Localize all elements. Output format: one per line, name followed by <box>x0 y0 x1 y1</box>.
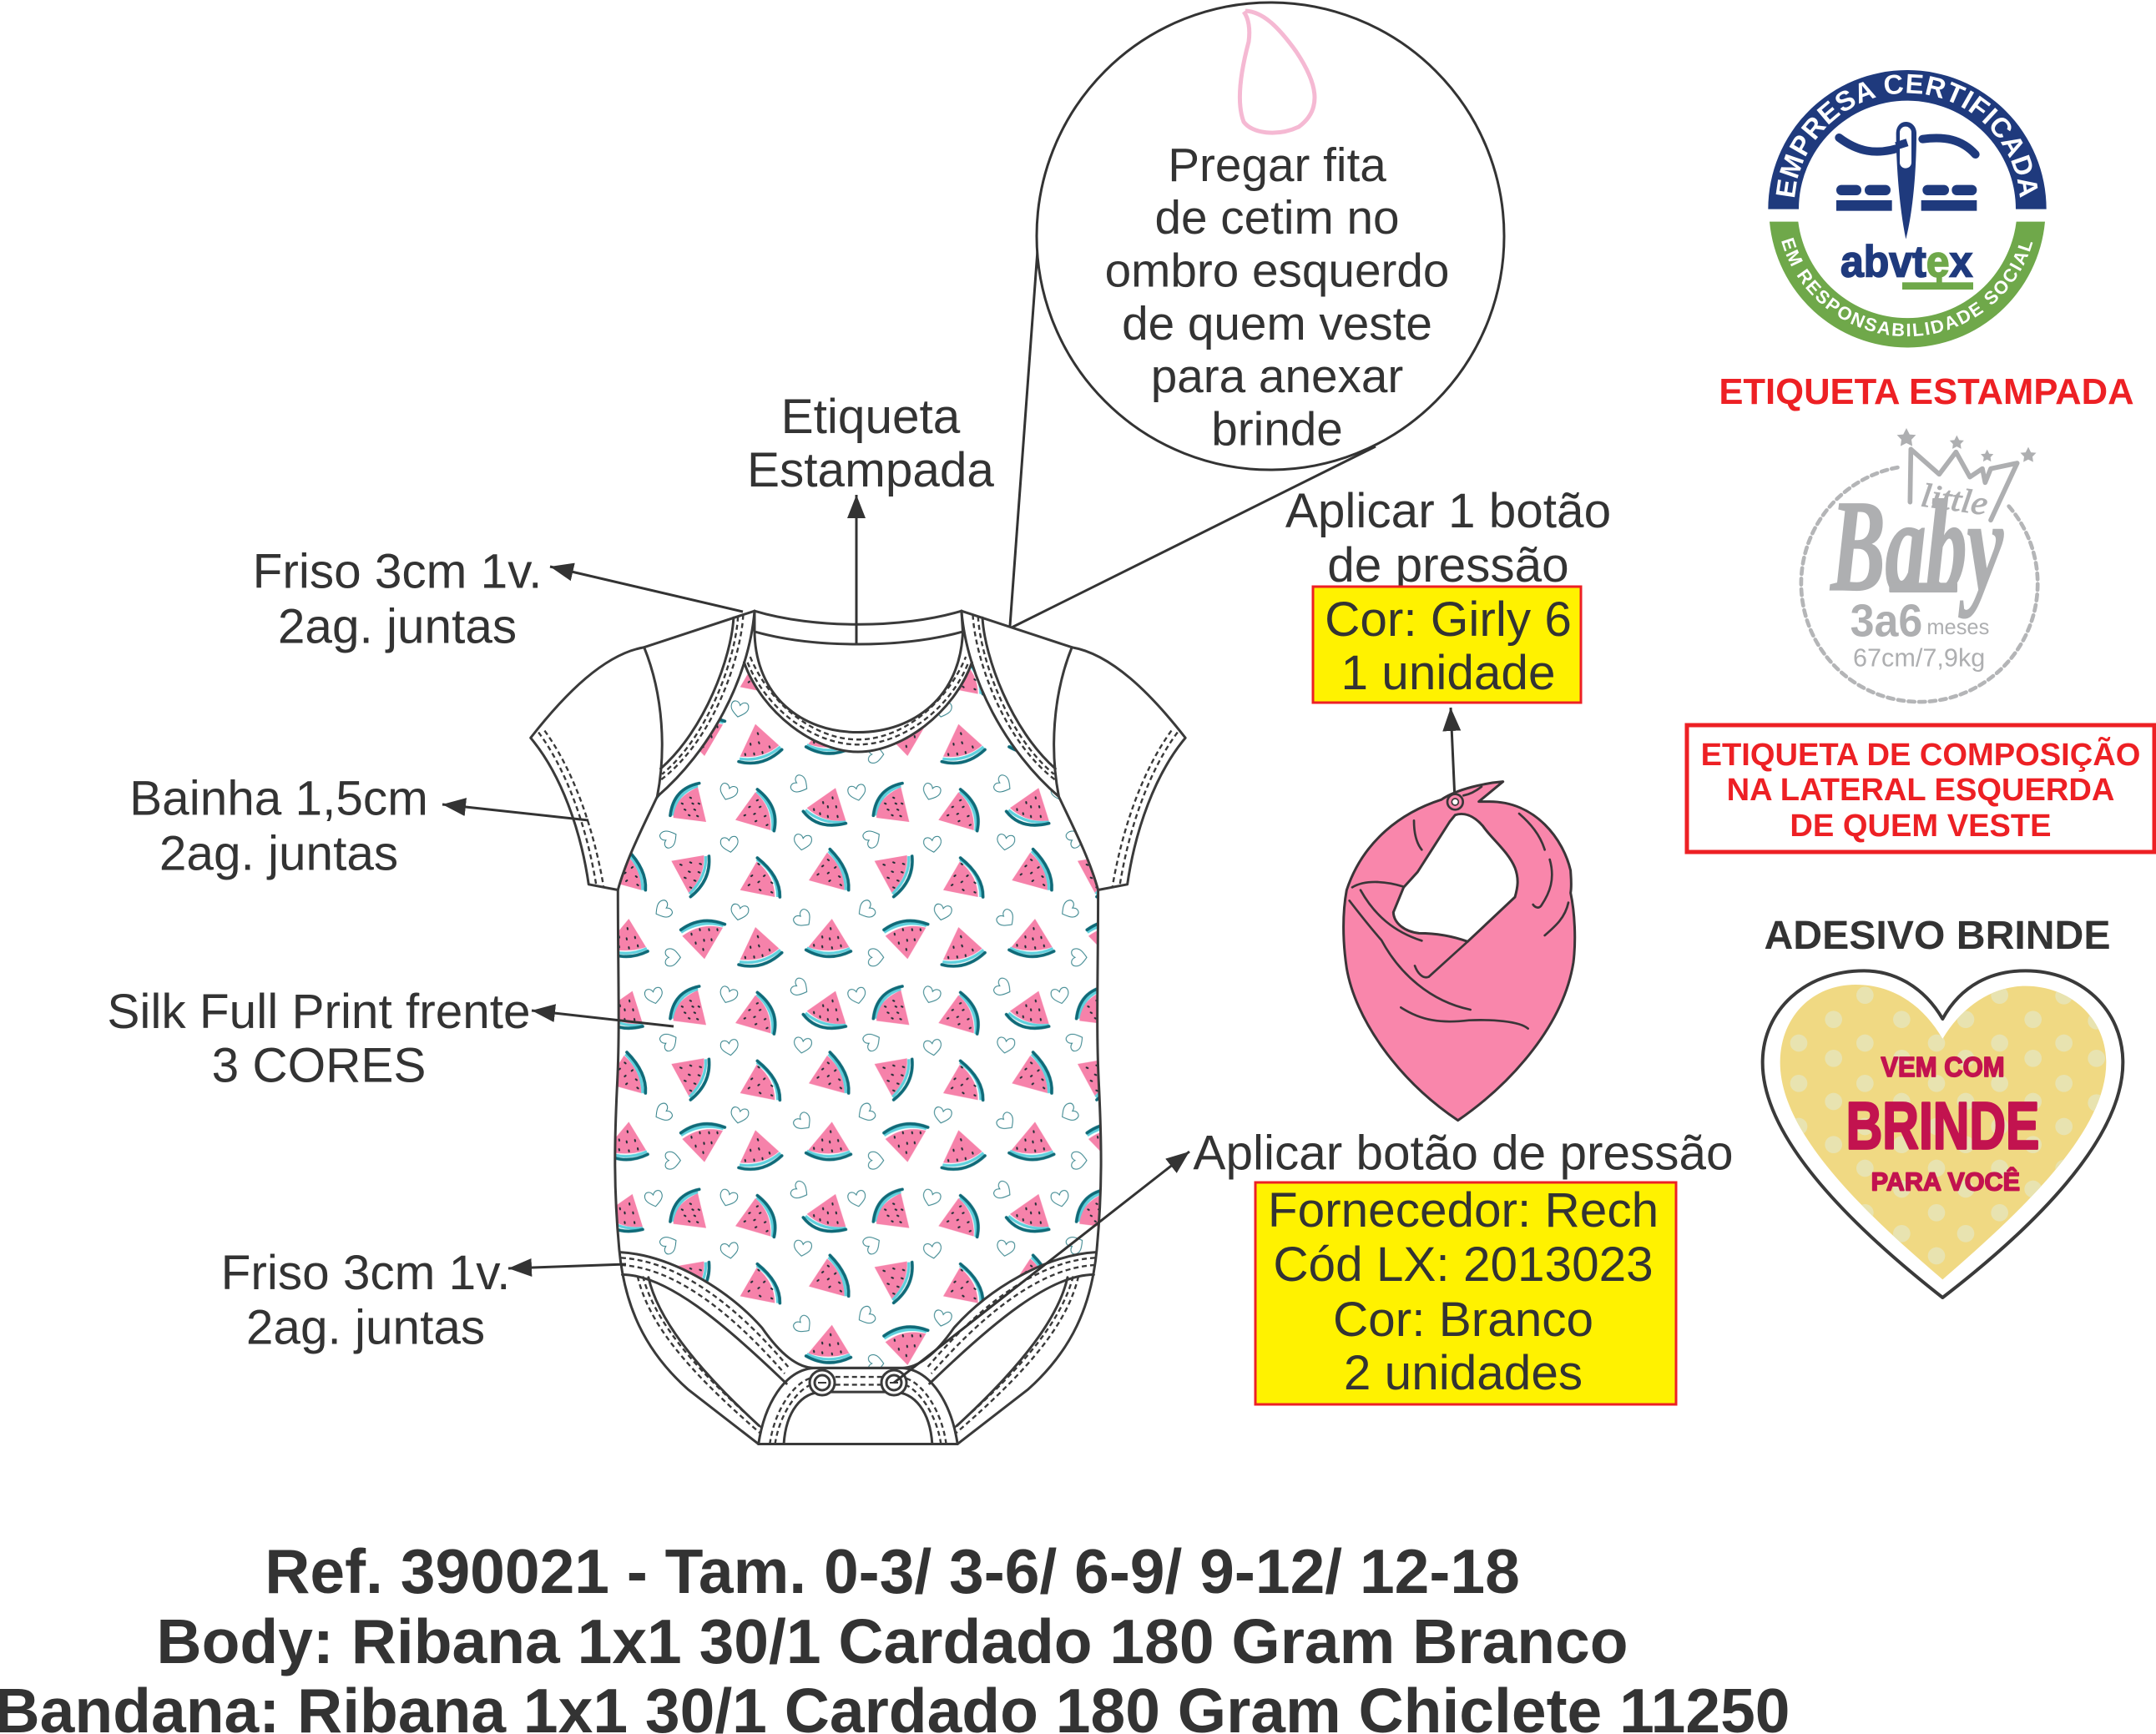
label: friso cintura: 2ag. juntas <box>246 1300 485 1355</box>
red box: etiqueta de composição: ETIQUETA DE COMPOSIÇÃO <box>1701 736 2140 773</box>
heart sticker <box>1763 970 2123 1298</box>
body base fill <box>531 611 1185 1444</box>
bodysuit garment <box>531 611 1194 1444</box>
callout circle: satin ribbon <box>1037 3 1504 470</box>
abvtex certification seal <box>1768 70 2047 347</box>
callout text: de quem veste <box>1122 298 1432 350</box>
label: friso gola: Friso 3cm 1v. <box>253 544 542 599</box>
callout text: para anexar <box>1151 350 1403 403</box>
yellow box: fornecedor <box>1255 1182 1676 1404</box>
label: friso gola: 2ag. juntas <box>278 599 517 654</box>
abvtex certification seal: EM RESPONSABILIDADE SOCIAL <box>1781 237 2033 337</box>
polka dots <box>1790 986 2105 1264</box>
snap on bandana <box>1447 794 1463 809</box>
abvtex certification seal: EMPRESA CERTIFICADA <box>1776 73 2038 198</box>
watermelon full print <box>616 666 1100 1367</box>
label: friso cintura: Friso 3cm 1v. <box>221 1246 510 1300</box>
heading: adesivo brinde: ADESIVO BRINDE <box>1764 913 2111 958</box>
yellow box: cor girly <box>1313 587 1581 703</box>
little baby printed label: 3a6 <box>1851 595 1922 647</box>
label: bainha: 2ag. juntas <box>159 826 398 881</box>
product specification footer: Body: Ribana 1x1 30/1 Cardado 180 Gram Branco <box>156 1606 1628 1676</box>
yellow box: fornecedor: 2 unidades <box>1344 1346 1583 1400</box>
callout leader lines <box>1010 250 1376 628</box>
label: aplicar 1 botão: Aplicar 1 botão <box>1285 484 1611 538</box>
yellow box: cor girly: Cor: Girly 6 <box>1325 592 1572 647</box>
yellow box: fornecedor: Cód LX: 2013023 <box>1273 1237 1654 1292</box>
red box: etiqueta de composição: DE QUEM VESTE <box>1790 809 2052 844</box>
callout text: Pregar fita <box>1168 139 1386 192</box>
sticker text: PARA VOCÊ <box>1871 1167 2020 1197</box>
label: aplicar 1 botão: de pressão <box>1327 538 1569 592</box>
snap button right <box>881 1370 906 1395</box>
product specification footer: Ref. 390021 - Tam. 0-3/ 3-6/ 6-9/ 9-12/ 12-18 <box>265 1536 1520 1606</box>
bandana <box>1344 782 1575 1121</box>
crown <box>1910 449 2017 520</box>
snap button left <box>810 1370 835 1395</box>
sticker text <box>1846 1052 2039 1197</box>
yellow box: fornecedor: Fornecedor: Rech <box>1268 1183 1659 1237</box>
icon: pink ribbon loop <box>1240 11 1315 133</box>
product specification footer <box>0 1536 1790 1734</box>
little baby printed label: little <box>1919 476 1990 522</box>
arrow: friso gola <box>550 567 743 612</box>
arrow: botão de pressão <box>894 1152 1189 1383</box>
callout text: ombro esquerdo <box>1105 245 1449 297</box>
red box: etiqueta de composição: NA LATERAL ESQUERDA <box>1727 773 2114 808</box>
arrow: bainha <box>442 804 588 820</box>
label: bainha: Bainha 1,5cm <box>129 771 428 826</box>
label: etiqueta estampada: Etiqueta <box>781 390 961 444</box>
garment outlines and stitching <box>531 611 1185 1444</box>
yellow box: fornecedor: Cor: Branco <box>1333 1293 1593 1347</box>
little baby printed label: 67cm/7,9kg <box>1853 643 1985 672</box>
little baby printed label: Baby <box>1830 473 2003 618</box>
arrow: etiqueta <box>855 495 858 643</box>
abvtex wordmark: abvtex <box>1840 238 1972 287</box>
heading: etiqueta estampada: ETIQUETA ESTAMPADA <box>1719 372 2134 412</box>
yellow box: cor girly: 1 unidade <box>1341 646 1556 700</box>
arrow: silk <box>532 1011 674 1026</box>
callout text: brinde <box>1211 404 1343 456</box>
red box: etiqueta de composição <box>1687 725 2154 852</box>
label: silk: Silk Full Print frente <box>107 985 531 1039</box>
little baby printed label <box>1801 428 2037 702</box>
arrow: friso cintura <box>508 1264 626 1268</box>
sticker text: VEM COM <box>1881 1052 2005 1083</box>
label: silk: 3 CORES <box>212 1038 426 1093</box>
label: etiqueta estampada: Estampada <box>747 443 994 497</box>
sticker text: BRINDE <box>1846 1089 2039 1163</box>
needle and seam icon <box>1836 122 1977 239</box>
arrow: bandana <box>1451 708 1455 800</box>
label: aplicar botão: Aplicar botão de pressão <box>1193 1127 1734 1180</box>
little baby printed label: meses <box>1926 614 1989 639</box>
callout text: de cetim no <box>1154 192 1400 244</box>
